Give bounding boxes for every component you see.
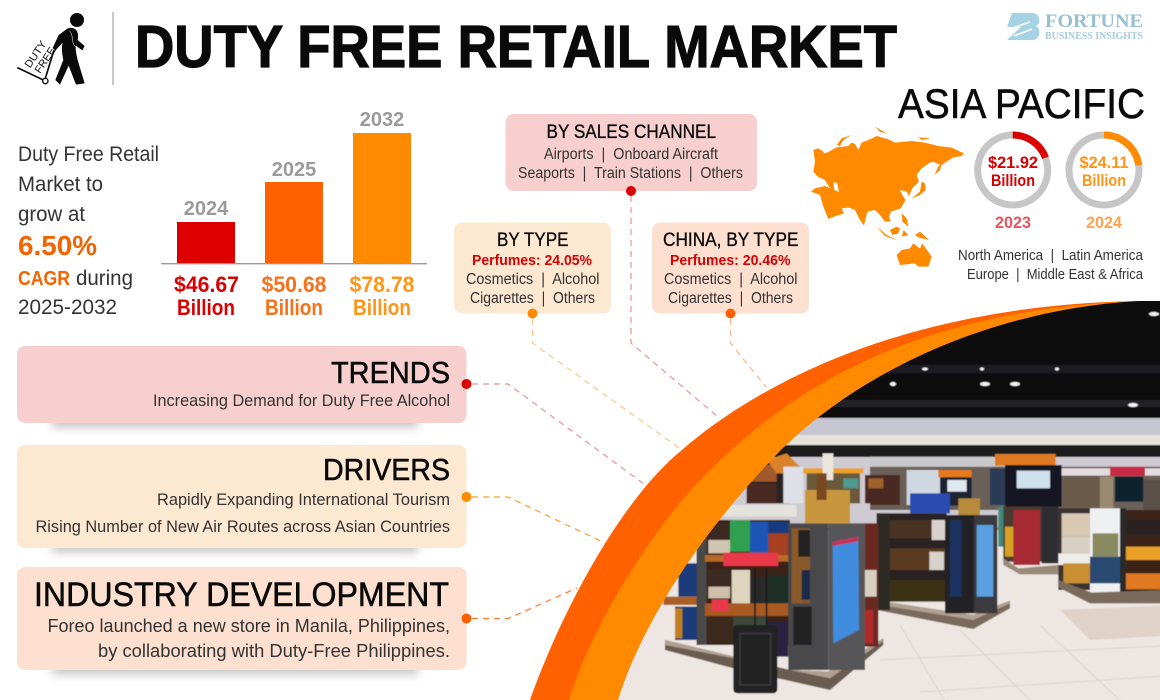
text block: other regions: Europe | Middle East & Africa (967, 267, 1144, 283)
title: DUTY FREE RETAIL MARKET (135, 14, 897, 80)
panel: by type (454, 222, 611, 318)
logo: Fortune Business Insights (1007, 11, 1143, 42)
panel: trends: TRENDS (331, 355, 450, 390)
bar chart: market size: Billion (177, 295, 235, 320)
dot: industry connector (462, 614, 472, 624)
panel: by sales channel: BY SALES CHANNEL (546, 122, 716, 143)
bar chart: market size: $46.67 (174, 272, 239, 297)
bar chart: market size: 2024 (184, 198, 229, 220)
panel: by type: Perfumes: 24.05% (472, 252, 592, 269)
panel: by type: Cosmetics | Alcohol (466, 271, 600, 288)
dot: sales channel connector (626, 186, 636, 196)
bar chart: market size: $78.78 (350, 272, 414, 297)
donut: 2023 value: Billion (991, 171, 1035, 190)
text block: CAGR statement (18, 143, 159, 319)
donut: 2024 value: $24.11 (1080, 153, 1128, 172)
connector lines (472, 196, 766, 618)
photo area: left half of store (663, 453, 890, 693)
donut: 2024 value: Billion (1082, 171, 1126, 190)
panel: drivers (17, 445, 472, 552)
panel: China by type: Cosmetics | Alcohol (664, 271, 798, 288)
text block: CAGR statement: 2025-2032 (18, 296, 117, 319)
text block: CAGR statement: CAGR (18, 268, 70, 290)
logo: Fortune Business Insights: FORTUNE (1045, 11, 1143, 32)
panel: industry development: by collaborating with Duty-Free Philippines. (98, 641, 450, 661)
icon: duty free traveller with cart: FREE (33, 45, 59, 76)
logo: Fortune Business Insights: BUSINESS INSIGHTS (1045, 31, 1143, 42)
bar chart: market size: 2032 (360, 109, 404, 131)
panel: industry development: Foreo launched a new store in Manila, Philippines, (48, 616, 450, 636)
text block: CAGR statement: Duty Free Retail (18, 143, 159, 166)
map: Asia Pacific (811, 127, 964, 267)
panel: China by type (652, 222, 809, 318)
donut: 2023 value (978, 135, 1048, 232)
dot: drivers connector (462, 492, 472, 502)
dot: trends connector (462, 379, 472, 389)
panel: drivers: DRIVERS (323, 452, 450, 487)
text block: CAGR statement: during (76, 267, 133, 290)
bar chart: market size: 2025 (272, 159, 316, 181)
panel: by type: BY TYPE (497, 230, 568, 251)
photo area: right half of store (870, 454, 1160, 640)
panel: China by type: Perfumes: 20.46% (670, 252, 790, 269)
panel: trends (17, 346, 472, 427)
decorative arc: light orange (569, 301, 1160, 700)
bar chart: market size: Billion (353, 295, 411, 320)
donut: 2023 value: 2023 (995, 213, 1031, 232)
panel: by sales channel: Airports | Onboard Aircraft (544, 146, 719, 163)
text block: CAGR statement: Market to (18, 173, 103, 196)
panel: industry development (17, 567, 472, 674)
text block: CAGR statement: grow at (18, 203, 85, 226)
panel: by sales channel: Seaports | Train Stations | Others (518, 165, 743, 182)
panel: drivers: Rising Number of New Air Routes across Asian Countries (36, 517, 450, 536)
icon: duty free traveller with cart: DUTY (23, 39, 49, 70)
dot: China connector (726, 308, 736, 318)
bar chart: market size (161, 109, 427, 320)
panel: China by type: CHINA, BY TYPE (663, 230, 798, 251)
heading: Asia Pacific: ASIA PACIFIC (898, 80, 1145, 127)
panel: by type: Cigarettes | Others (470, 290, 595, 307)
panel: China by type: Cigarettes | Others (668, 290, 793, 307)
decorative arc: dark orange (530, 301, 1160, 700)
panel: industry development: INDUSTRY DEVELOPMENT (34, 576, 449, 614)
panel: by sales channel (506, 114, 757, 196)
photo: duty free store interior (590, 280, 1160, 700)
icon: duty free traveller with cart (17, 12, 114, 85)
text block: CAGR statement: 6.50% (18, 230, 97, 261)
bar chart: market size: Billion (265, 295, 323, 320)
dot: by type connector (528, 308, 538, 318)
text block: other regions: North America | Latin America (958, 248, 1144, 264)
panel: trends: Increasing Demand for Duty Free Alcohol (153, 391, 450, 410)
donut: 2024 value: 2024 (1086, 213, 1123, 232)
panel: drivers: Rapidly Expanding International Tourism (157, 490, 450, 509)
text block: other regions (958, 248, 1144, 283)
donut: 2023 value: $21.92 (988, 153, 1038, 172)
bar chart: market size: $50.68 (262, 272, 326, 297)
donut: 2024 value (1069, 135, 1139, 232)
